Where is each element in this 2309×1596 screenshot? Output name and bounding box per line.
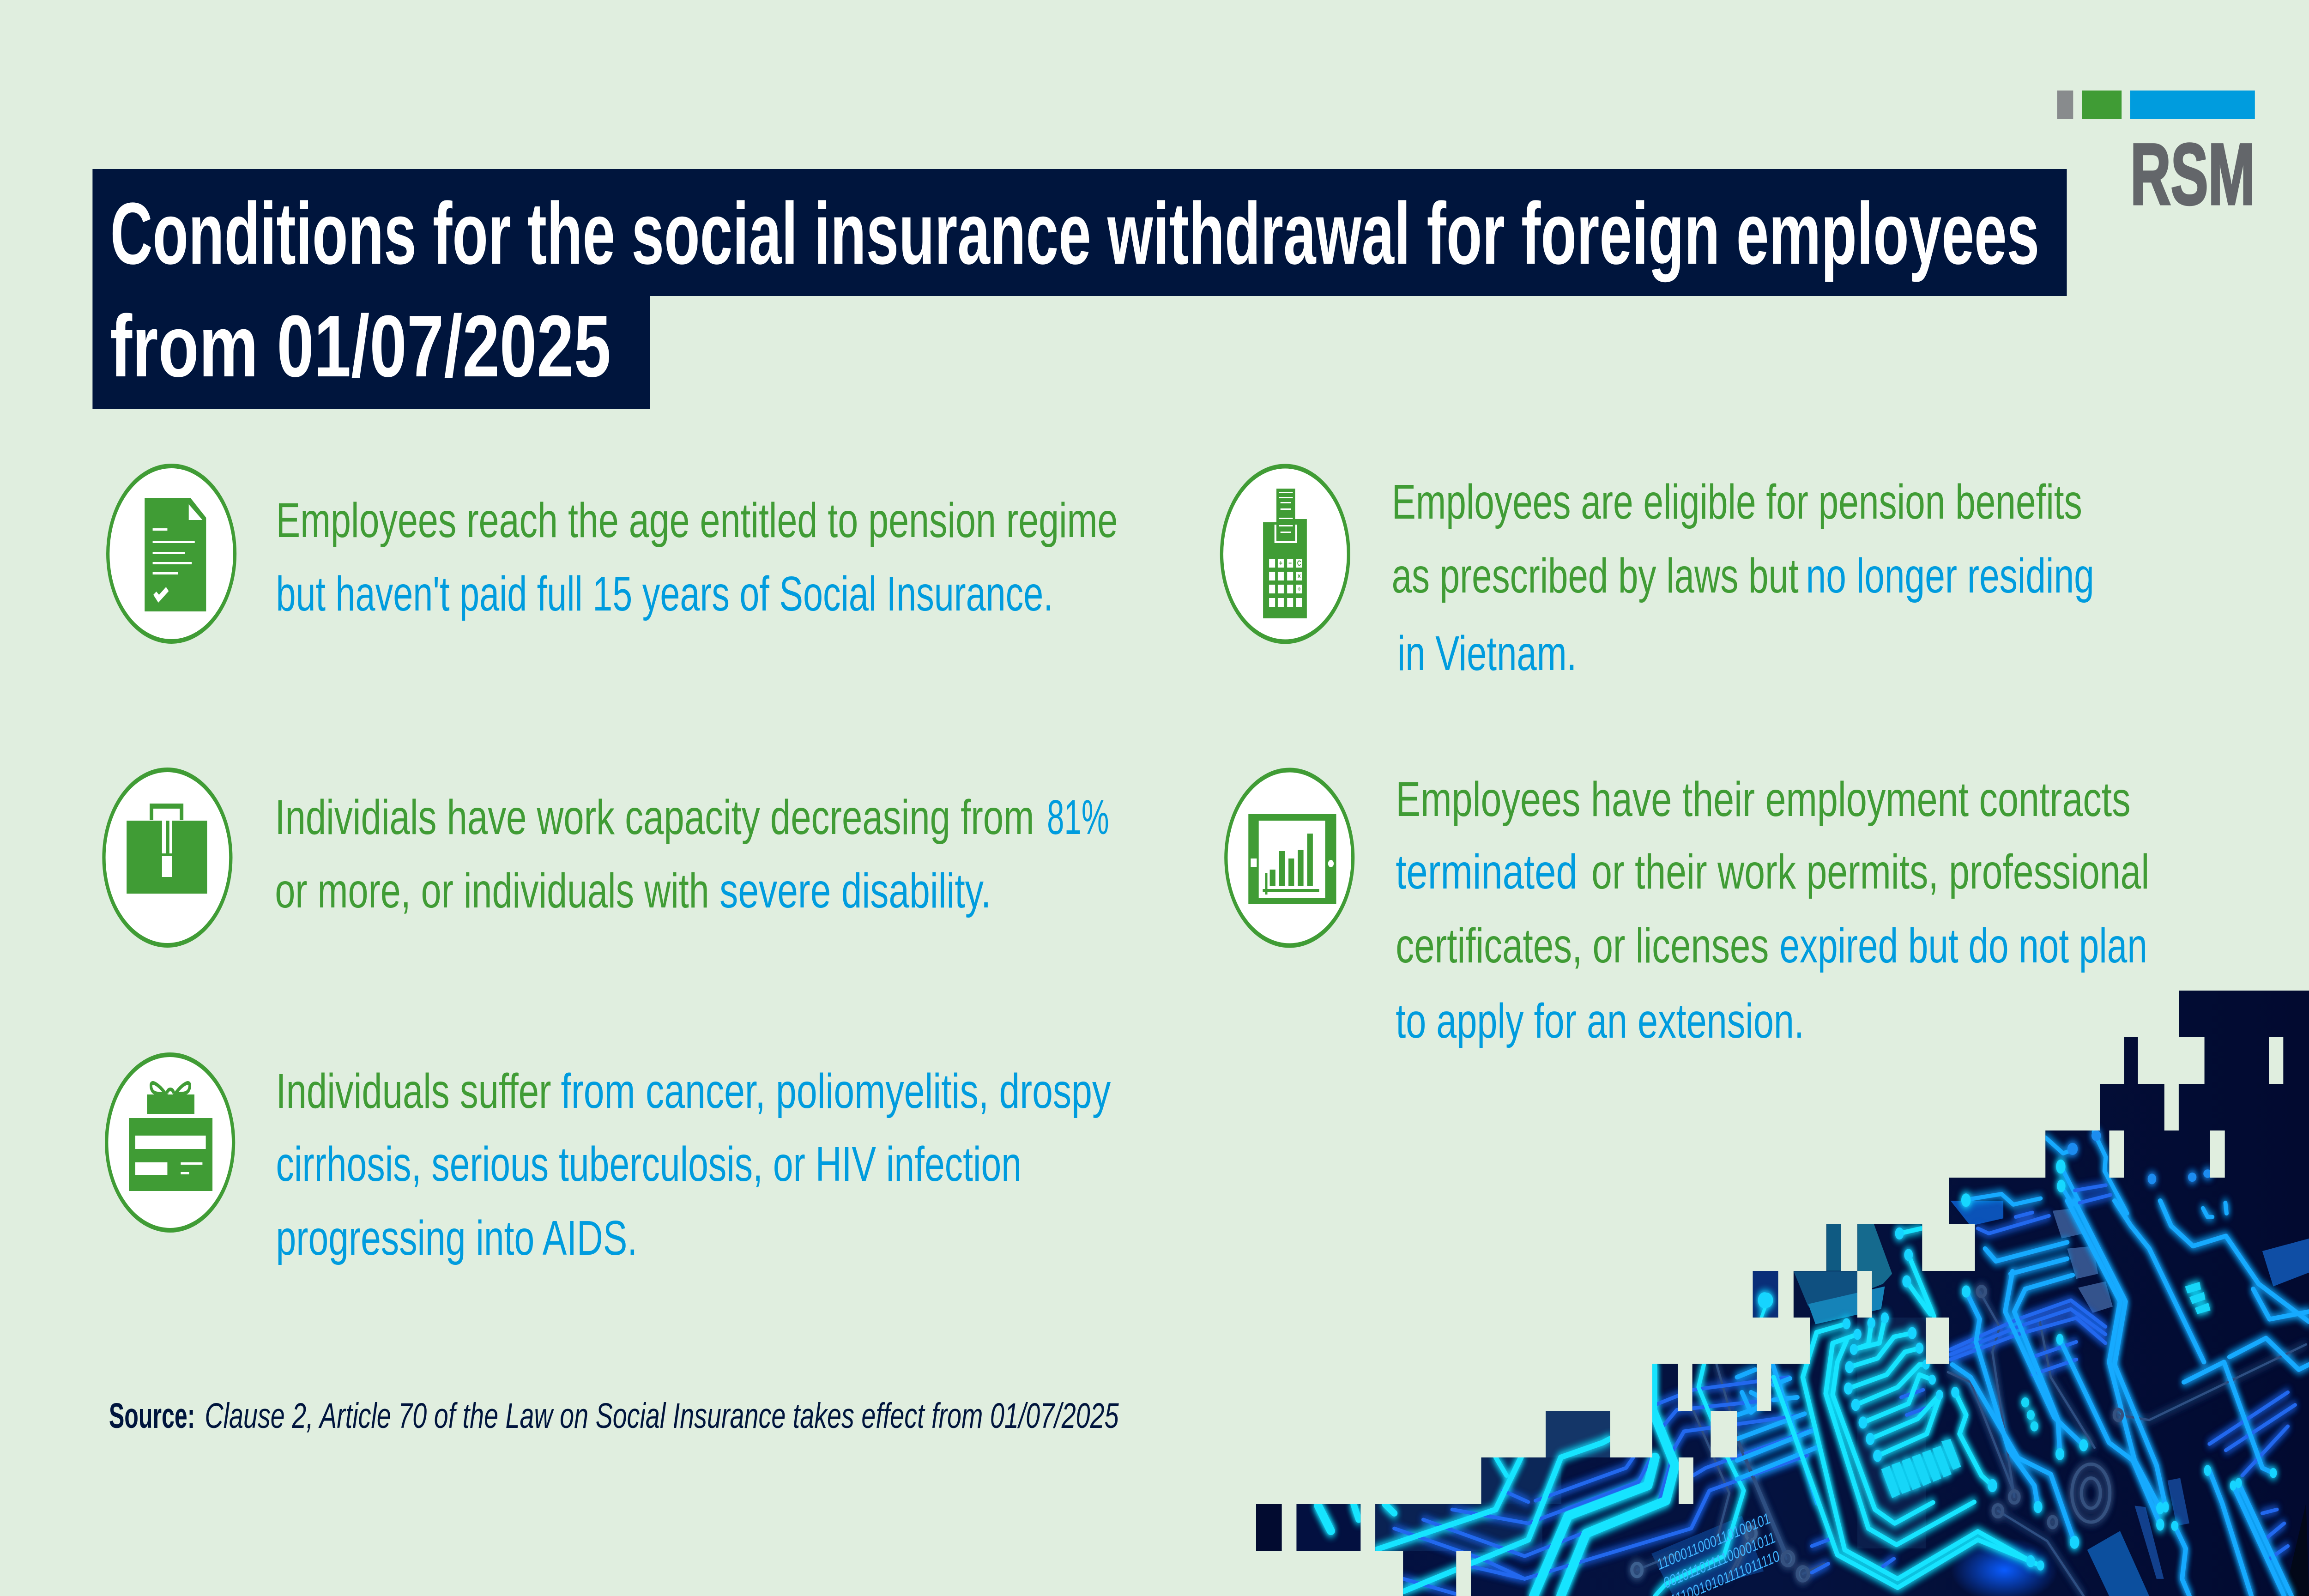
text: contract terminated: certificates, or licenses <box>1396 918 1769 973</box>
RSM logo: RSM <box>2130 125 2255 223</box>
binary code strip: 0010110111100001011 <box>1662 1529 1777 1592</box>
text: pension age: Employees reach the age entitled to pension regime <box>276 493 1118 548</box>
text: work capacity <box>275 790 1109 918</box>
icon: calculator: − <box>1288 559 1292 568</box>
text: no longer residing: no longer residing <box>1806 548 2094 603</box>
RSM logo <box>2057 91 2255 223</box>
text: contract terminated: expired but do not plan <box>1779 918 2147 973</box>
binary code strip <box>1656 1510 1781 1596</box>
text: work capacity: 81% <box>1047 790 1109 845</box>
panels and components <box>1256 1201 2309 1596</box>
icon: gift card <box>107 1055 234 1230</box>
text: contract terminated <box>1396 772 2149 1048</box>
text: illnesses: Individuals suffer <box>276 1064 551 1118</box>
title <box>92 169 2067 409</box>
icon: briefcase <box>104 770 231 945</box>
title: from 01/07/2025 <box>110 297 611 395</box>
icon: calculator: C <box>1297 559 1301 568</box>
source note: Clause 2, Article 70 of the Law on Social Insurance takes effect from 01/07/2025 <box>205 1396 1119 1436</box>
text: contract terminated: to apply for an extension. <box>1396 993 1804 1048</box>
text: work capacity: or more, or individuals with <box>275 863 709 918</box>
icon: calculator: ÷ <box>1298 585 1301 594</box>
text: illnesses <box>276 1064 1111 1265</box>
text: contract terminated: terminated <box>1396 844 1578 899</box>
left part <box>1318 1293 1817 1596</box>
text: pension age <box>276 493 1118 621</box>
circuit board image <box>1236 970 2309 1596</box>
icon: calculator: × <box>1298 572 1301 581</box>
source note: Source: <box>109 1396 195 1436</box>
icon: tablet chart <box>1226 770 1353 946</box>
glowing traces <box>1318 1130 2309 1596</box>
soft upper-right traces <box>1949 1001 2309 1261</box>
text: no longer residing: Employees are eligible for pension benefits <box>1392 474 2082 529</box>
centre part <box>1737 1201 2309 1596</box>
text: work capacity: severe disability. <box>719 863 991 918</box>
text: no longer residing <box>1392 474 2094 681</box>
text: no longer residing: in Vietnam. <box>1397 626 1577 681</box>
text: contract terminated: Employees have their employment contracts <box>1396 772 2131 827</box>
binary code strip: 1100011000110100101 <box>1656 1510 1771 1574</box>
icon: calculator: + <box>1279 559 1282 568</box>
text: illnesses: cirrhosis, serious tuberculosis, or HIV infection <box>276 1137 1022 1191</box>
text: illnesses: progressing into AIDS. <box>276 1210 637 1265</box>
text: illnesses: from cancer, poliomyelitis, drospy <box>561 1064 1111 1118</box>
text: pension age: but haven't paid full 15 years of Social Insurance. <box>276 566 1053 621</box>
upper right bright part <box>1961 1130 2226 1217</box>
title: Conditions for the social insurance withdrawal for foreign employees <box>110 185 2039 283</box>
text: work capacity: Individials have work capacity decreasing from <box>275 790 1034 845</box>
text: no longer residing: as prescribed by laws but <box>1392 548 1799 603</box>
text: contract terminated: or their work permits, professional <box>1591 844 2149 899</box>
icon: document <box>108 466 235 641</box>
icon: calculator <box>1221 466 1348 642</box>
